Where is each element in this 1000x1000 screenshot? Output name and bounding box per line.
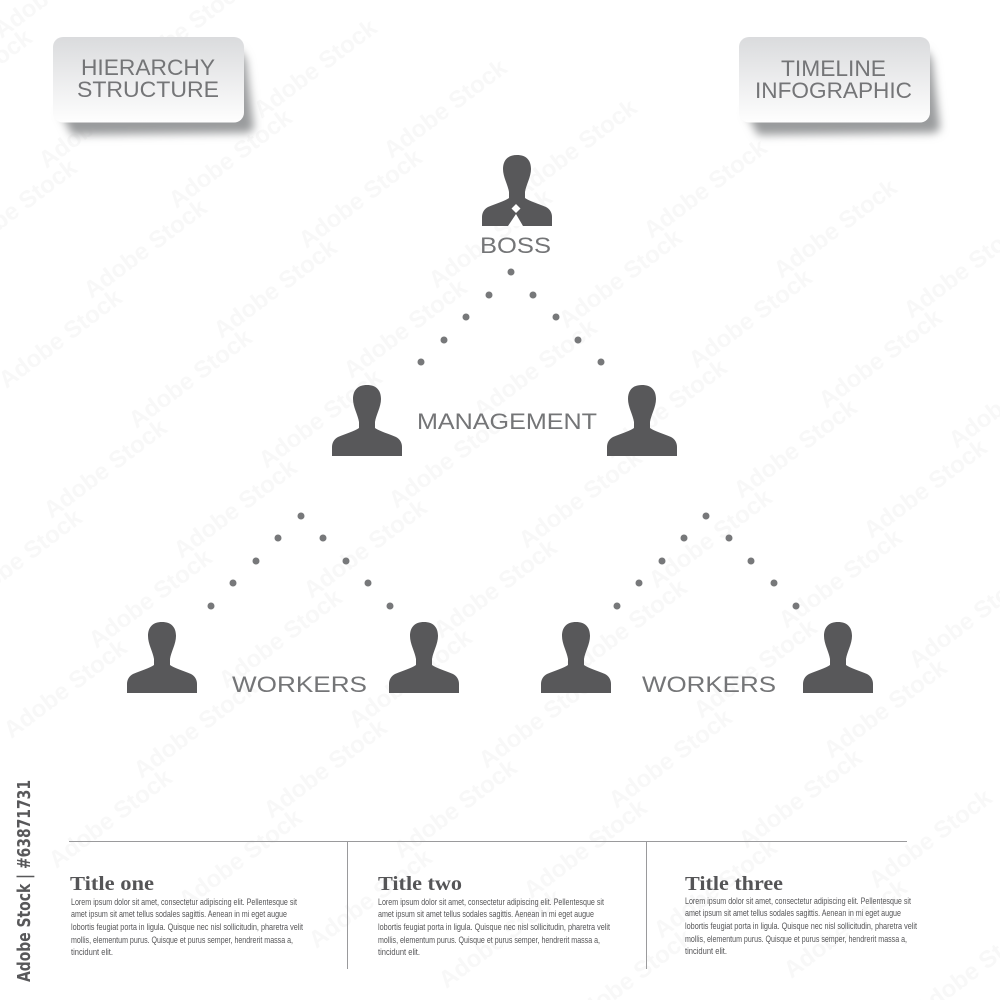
text block: title three: tincidunt elit. <box>685 946 727 957</box>
badge: hierarchy structure <box>53 37 254 135</box>
badge: timeline infographic: TIMELINE <box>781 56 886 81</box>
watermark pattern: Adobe Stock <box>424 184 558 294</box>
watermark pattern: Adobe Stock <box>304 844 438 954</box>
text block: title one: Title one <box>70 873 154 895</box>
text block: title three: mollis, elementum purus. Quisque et purus semper, hendrerit massa a, <box>685 934 907 945</box>
text block: title one: mollis, elementum purus. Quisque et purus semper, hendrerit massa a, <box>71 935 293 946</box>
watermark pattern: Adobe Stock <box>559 574 693 684</box>
watermark pattern: Adobe Stock <box>389 754 523 864</box>
watermark pattern: Adobe Stock <box>644 484 778 594</box>
text block: title two: lobortis feugiat porta in ligula. Quisque nec nisl sollicitudin, pharetra velit <box>378 922 610 933</box>
watermark pattern: Adobe Stock <box>344 624 478 734</box>
text block: title two: Title two <box>378 873 462 895</box>
text block: title one: lobortis feugiat porta in ligula. Quisque nec nisl sollicitudin, pharetra velit <box>71 922 303 933</box>
watermark pattern: Adobe Stock <box>814 304 948 414</box>
watermark pattern: Adobe Stock <box>174 804 308 914</box>
text block: title three: lobortis feugiat porta in ligula. Quisque nec nisl sollicitudin, pharetra velit <box>685 921 917 932</box>
watermark pattern: Adobe Stock <box>339 274 473 384</box>
watermark pattern: Adobe Stock <box>164 104 298 214</box>
watermark pattern: Adobe Stock <box>384 404 518 514</box>
watermark pattern: Adobe Stock <box>294 144 428 254</box>
watermark pattern: Adobe Stock <box>769 174 903 284</box>
text block: title one: Lorem ipsum dolor sit amet, consectetur adipiscing elit. Pellentesque sit <box>71 897 297 908</box>
watermark pattern: Adobe Stock <box>729 394 863 504</box>
watermark pattern: Adobe Stock <box>214 584 348 694</box>
watermark pattern: Adobe Stock <box>519 794 653 904</box>
dotted connector: boss to management <box>418 268 604 366</box>
icon: worker 2 <box>389 622 459 693</box>
text block: title two: mollis, elementum purus. Quisque et purus semper, hendrerit massa a, <box>378 935 600 946</box>
watermark pattern: Adobe Stock <box>379 54 513 164</box>
label: management: MANAGEMENT <box>417 409 597 434</box>
watermark pattern: Adobe Stock <box>639 134 773 244</box>
watermark pattern: Adobe Stock <box>259 714 393 824</box>
icon: boss <box>482 155 552 226</box>
watermark pattern: Adobe Stock <box>34 64 168 174</box>
label: workers left: WORKERS <box>232 672 367 697</box>
text block: title three: Lorem ipsum dolor sit amet, consectetur adipiscing elit. Pellentesque sit <box>685 896 911 907</box>
text block: title two: amet ipsum sit amet tellus sodales sagittis. Aenean in mi eget augue <box>378 909 594 920</box>
text block: title three: Title three <box>685 873 783 895</box>
text block: title one: tincidunt elit. <box>71 947 113 958</box>
label: boss: BOSS <box>480 233 551 258</box>
watermark pattern: Adobe Stock <box>209 234 343 344</box>
watermark pattern: Adobe Stock <box>79 194 213 304</box>
watermark pattern: Adobe Stock <box>604 704 738 814</box>
watermark pattern: Adobe Stock <box>129 674 263 784</box>
watermark pattern: Adobe Stock <box>474 664 608 774</box>
badge: timeline infographic <box>739 37 940 135</box>
dotted connector: right workers <box>614 512 800 610</box>
watermark pattern: Adobe Stock <box>434 884 568 994</box>
icon: worker 3 <box>541 622 611 693</box>
badge: hierarchy structure: STRUCTURE <box>77 77 219 102</box>
watermark pattern: Adobe Stock <box>734 744 868 854</box>
watermark pattern: Adobe Stock <box>864 784 998 894</box>
watermark pattern: Adobe Stock <box>514 444 648 554</box>
dotted connector: left workers <box>208 512 394 610</box>
watermark pattern: Adobe Stock <box>599 354 733 464</box>
watermark pattern: Adobe Stock <box>254 364 388 474</box>
text block: title three <box>685 873 917 957</box>
watermark pattern: Adobe Stock <box>779 874 913 984</box>
watermark pattern: Adobe Stock <box>819 654 953 764</box>
watermark pattern: Adobe Stock <box>469 314 603 424</box>
watermark pattern: Adobe Stock <box>859 434 993 544</box>
icon: manager right <box>607 385 677 456</box>
watermark pattern: Adobe Stock <box>44 764 178 874</box>
icon: manager left <box>332 385 402 456</box>
watermark pattern: Adobe Stock <box>774 524 908 634</box>
badge: hierarchy structure: HIERARCHY <box>81 55 215 80</box>
text block: title three: amet ipsum sit amet tellus sodales sagittis. Aenean in mi eget augue <box>685 908 901 919</box>
watermark pattern: Adobe Stock <box>299 494 433 604</box>
text block: title one <box>70 873 303 958</box>
watermark pattern: Adobe Stock <box>689 614 823 724</box>
text block: title two <box>378 873 610 958</box>
watermark pattern: Adobe Stock <box>84 544 218 654</box>
stock id: Adobe Stock | #63871731 <box>14 780 35 982</box>
label: workers right: WORKERS <box>642 672 776 697</box>
icon: worker 4 <box>803 622 873 693</box>
watermark pattern: Adobe Stock <box>554 224 688 334</box>
watermark pattern: Adobe Stock <box>124 324 258 434</box>
text block: title one: amet ipsum sit amet tellus sodales sagittis. Aenean in mi eget augue <box>71 909 287 920</box>
watermark pattern: Adobe Stock <box>39 414 173 524</box>
watermark pattern: Adobe Stock <box>169 454 303 564</box>
watermark pattern: Adobe Stock <box>684 264 818 374</box>
watermark pattern: Adobe Stock <box>509 94 643 204</box>
text block: title two: Lorem ipsum dolor sit amet, consectetur adipiscing elit. Pellentesque sit <box>378 897 604 908</box>
icon: worker 1 <box>127 622 197 693</box>
watermark pattern: Adobe Stock <box>429 534 563 644</box>
watermark pattern: Adobe Stock <box>0 634 133 744</box>
text block: title two: tincidunt elit. <box>378 947 420 958</box>
watermark pattern: Adobe Stock <box>249 14 383 124</box>
badge: timeline infographic: INFOGRAPHIC <box>755 78 912 103</box>
watermark pattern: Adobe Stock <box>649 834 783 944</box>
